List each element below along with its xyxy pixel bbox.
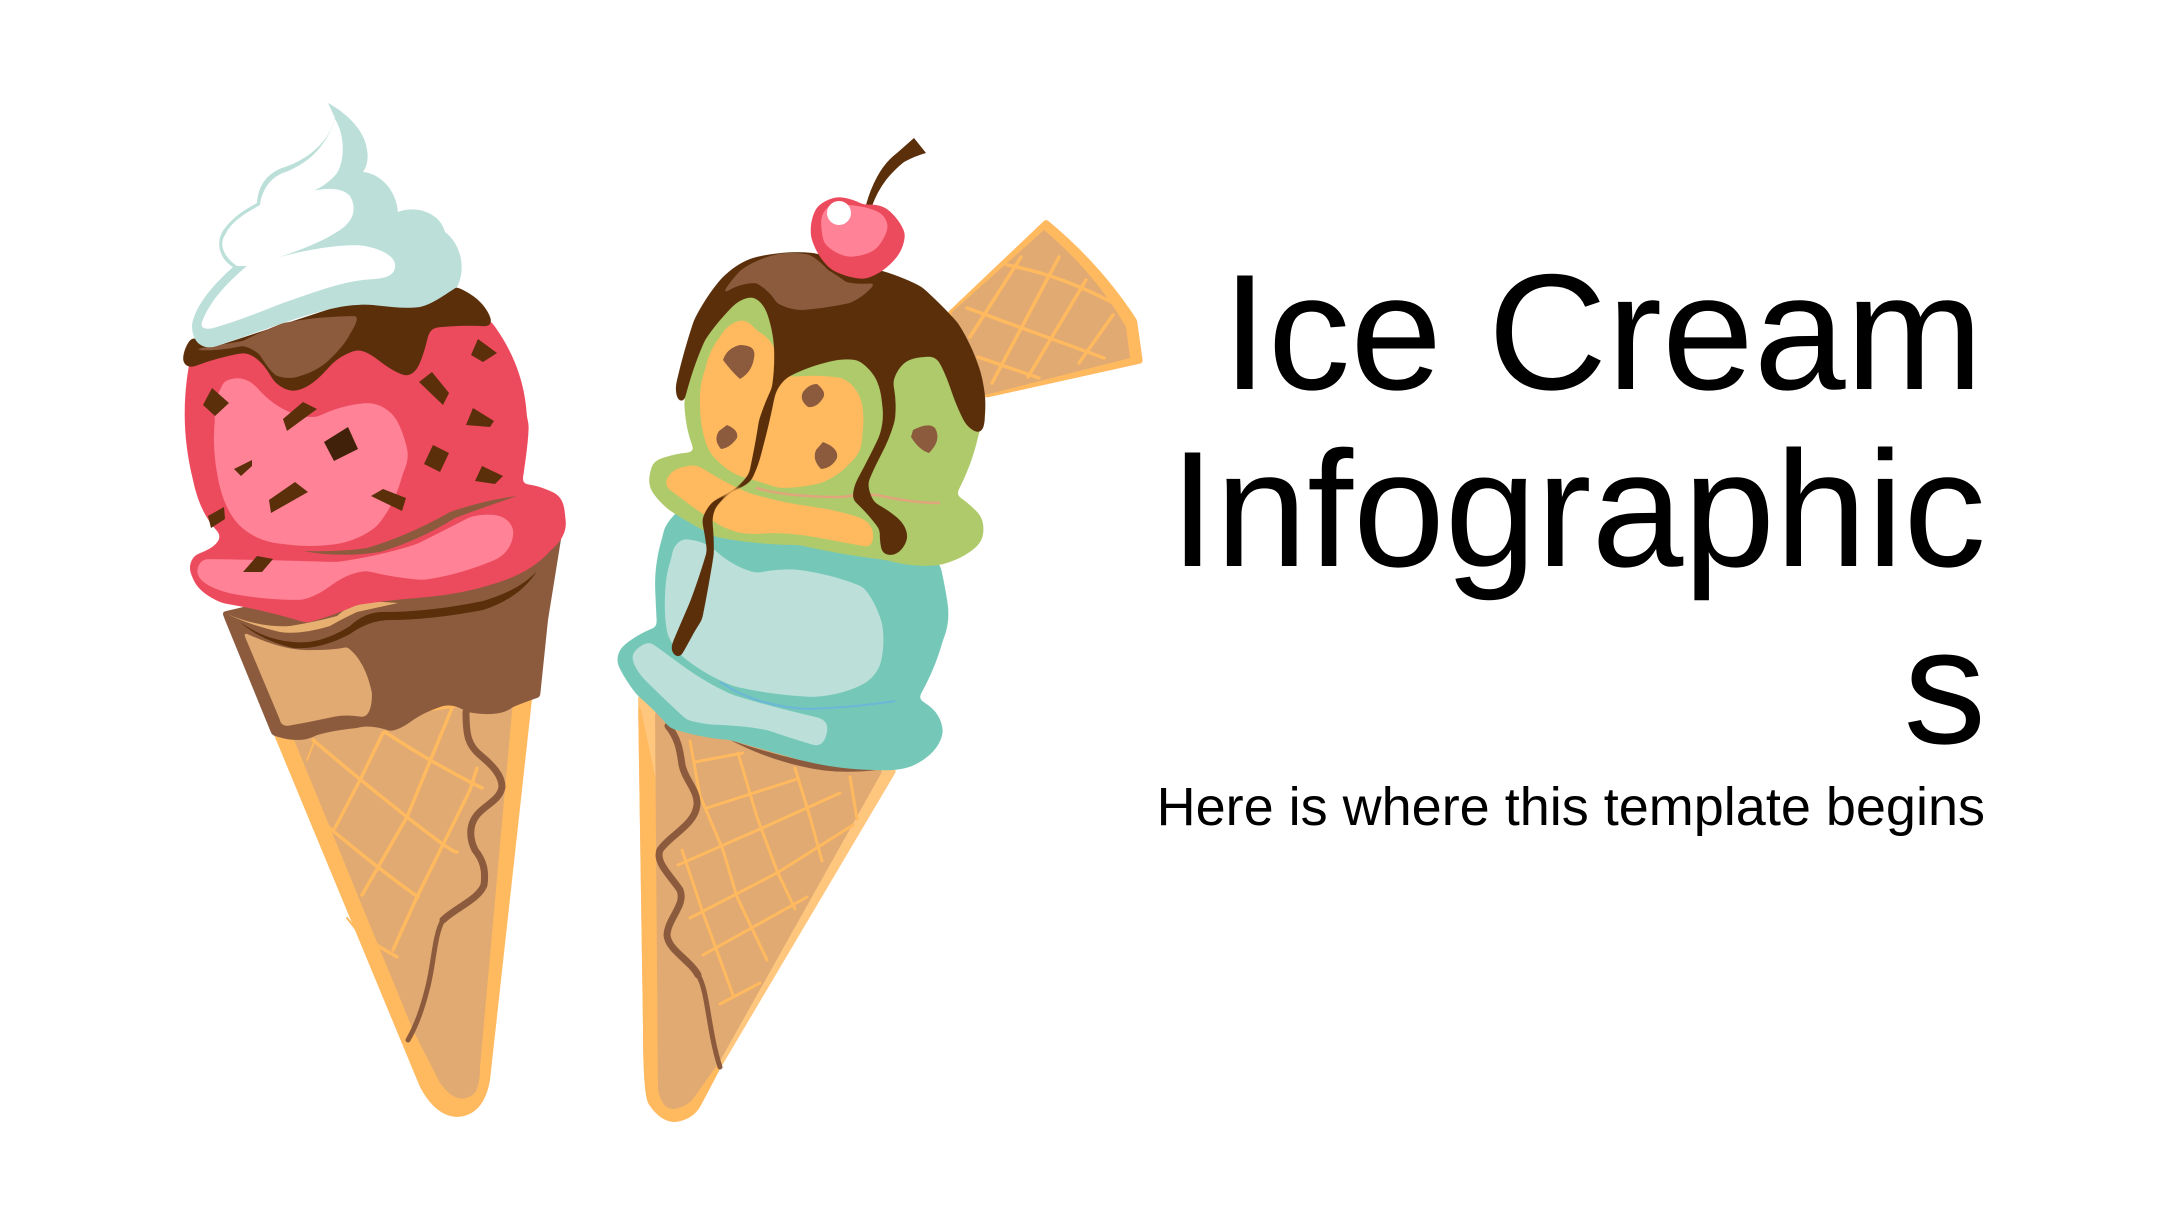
chocolate drip on cone xyxy=(408,712,502,1040)
wafer xyxy=(947,219,1143,398)
title: Infographic xyxy=(1170,417,1986,601)
chocolate sleeve xyxy=(222,533,562,740)
cherry xyxy=(811,138,926,279)
chocolate chips xyxy=(716,345,937,469)
scoop: strawberry xyxy=(185,320,566,623)
title xyxy=(1170,240,1986,778)
title: Ice Cream xyxy=(1222,240,1983,424)
cone: left waffle cone xyxy=(272,690,533,1117)
chocolate sauce xyxy=(183,287,492,391)
scoop: mint xyxy=(617,500,948,770)
scoop: pistachio xyxy=(649,287,984,566)
illustration: green and teal scoop cone xyxy=(617,138,1143,1122)
cone: right waffle cone xyxy=(638,695,897,1122)
chocolate sauce xyxy=(671,252,985,658)
subtitle: Here is where this template begins xyxy=(1157,777,1985,837)
title: s xyxy=(1904,594,1986,778)
chocolate chips xyxy=(203,339,503,572)
chocolate drip xyxy=(659,726,720,1067)
whipped cream xyxy=(192,103,462,347)
illustration: red scoop cone xyxy=(183,103,566,1117)
